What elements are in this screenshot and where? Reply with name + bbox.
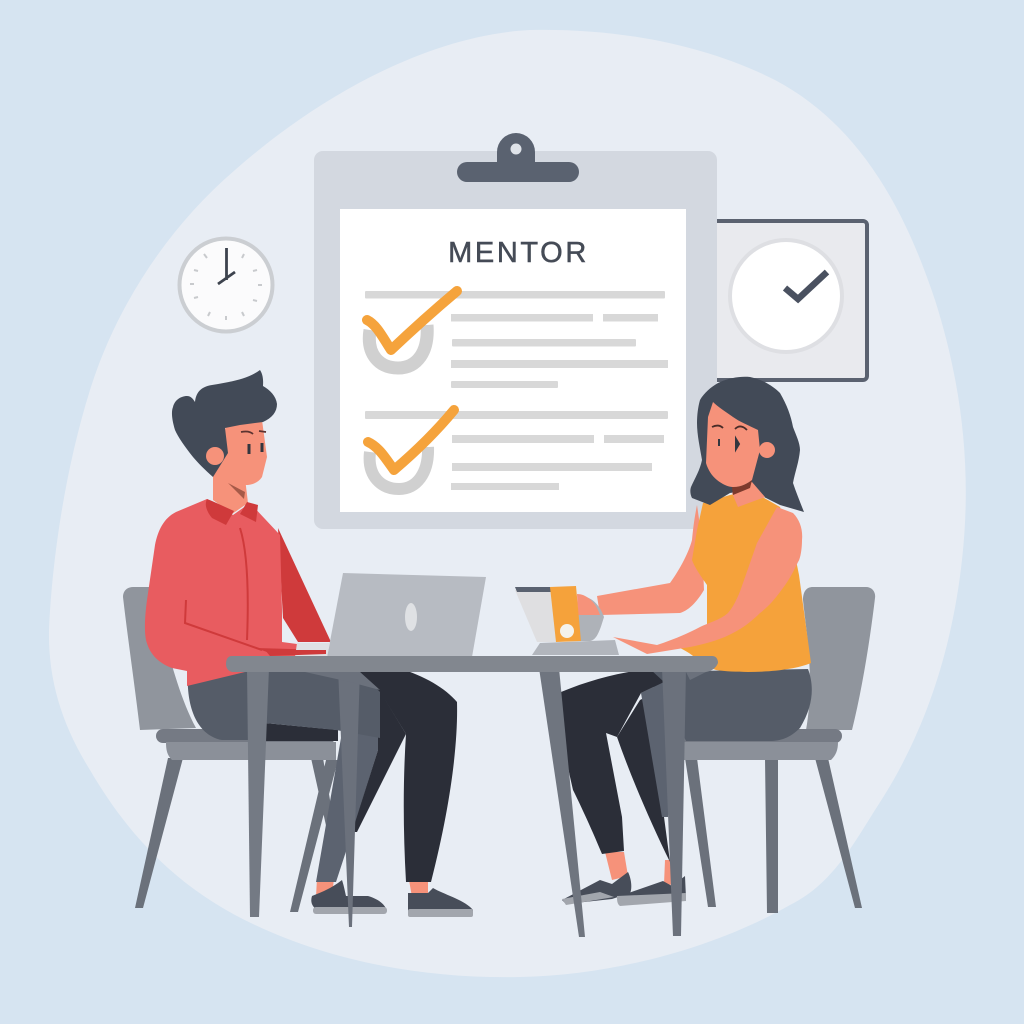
chair left — [123, 587, 338, 912]
cup handle — [578, 597, 604, 641]
cup dot — [560, 624, 574, 638]
man hand — [265, 650, 326, 656]
man hair — [172, 370, 277, 477]
man head — [213, 420, 267, 485]
man shoe right sole — [408, 909, 473, 917]
clock hands — [218, 248, 235, 284]
man cuff — [256, 648, 326, 655]
collar left — [206, 499, 234, 525]
table underside right — [686, 672, 706, 680]
woman back arm — [597, 505, 704, 615]
man face details — [241, 431, 266, 434]
chair right seat — [680, 729, 842, 743]
woman eyes — [719, 439, 739, 449]
collar right — [240, 502, 258, 522]
man front leg — [358, 668, 457, 882]
saucer — [532, 640, 619, 655]
clipboard board — [314, 151, 717, 529]
woman front leg — [561, 669, 664, 854]
clipboard — [314, 133, 717, 529]
chair left seat — [156, 729, 336, 743]
framed check clock — [700, 221, 867, 380]
orange check 1 — [367, 291, 457, 350]
orange check 2 — [368, 410, 454, 470]
man thigh — [188, 672, 380, 740]
woman thigh — [640, 669, 812, 741]
chair left seat base — [166, 742, 336, 760]
woman hand — [577, 594, 600, 615]
laptop — [265, 573, 486, 657]
laptop screen — [327, 573, 486, 657]
man shoe right — [408, 888, 473, 915]
man shoe left — [311, 880, 387, 911]
woman ear — [759, 442, 775, 458]
chin shadow — [732, 480, 752, 495]
man neck — [213, 470, 248, 514]
man shirt — [145, 499, 327, 686]
woman shoe left sole — [562, 892, 614, 905]
checkbox 2 — [368, 410, 454, 489]
cup body — [515, 587, 556, 642]
woman near arm — [613, 507, 802, 654]
table leg 1 — [247, 668, 269, 917]
clip hole — [510, 144, 522, 154]
text lines — [365, 291, 668, 490]
laptop logo — [405, 603, 417, 631]
shirt fold lines — [185, 528, 262, 650]
table leg 4 — [662, 668, 686, 936]
woman brows — [712, 426, 747, 430]
woman face — [706, 402, 760, 487]
man shoe left sole — [313, 907, 387, 914]
woman ankles — [605, 852, 673, 885]
man far leg dark — [352, 688, 406, 832]
chair right back — [803, 587, 875, 730]
woman inner thigh gray — [641, 680, 668, 817]
title: MENTOR: MENTOR — [448, 237, 589, 269]
woman — [515, 377, 812, 906]
woman shoe right sole — [617, 893, 686, 906]
man ankles — [316, 878, 428, 897]
woman hair — [690, 377, 804, 512]
table leg 3 — [539, 668, 585, 937]
chair right — [680, 587, 875, 913]
check mark on clock — [785, 272, 827, 299]
man ear — [206, 447, 224, 465]
checkbox 1 — [367, 291, 457, 368]
table — [226, 656, 718, 937]
man eyes — [249, 443, 262, 454]
woman shoe left — [562, 872, 631, 904]
chair right legs — [685, 758, 862, 913]
neck shadow — [228, 483, 245, 499]
man — [145, 370, 473, 917]
clipboard clip — [457, 133, 579, 182]
chair left legs — [135, 758, 338, 912]
woman neck — [732, 482, 765, 507]
chair right seat base — [680, 742, 838, 760]
cup band — [550, 586, 581, 642]
cup rim — [515, 587, 552, 592]
woman back leg — [617, 690, 670, 862]
man under thigh shadow — [265, 723, 338, 741]
wall clock — [180, 238, 272, 332]
woman shoe right — [617, 876, 686, 903]
woman cup and hand — [515, 586, 619, 655]
table leg 2 — [338, 668, 360, 927]
table top — [226, 656, 718, 672]
paper — [340, 209, 686, 512]
man far leg gray — [316, 700, 378, 882]
table underside left — [305, 672, 380, 690]
chair left back — [123, 587, 196, 730]
woman top — [680, 490, 811, 672]
man arm back — [278, 528, 331, 642]
laptop base — [295, 643, 330, 657]
